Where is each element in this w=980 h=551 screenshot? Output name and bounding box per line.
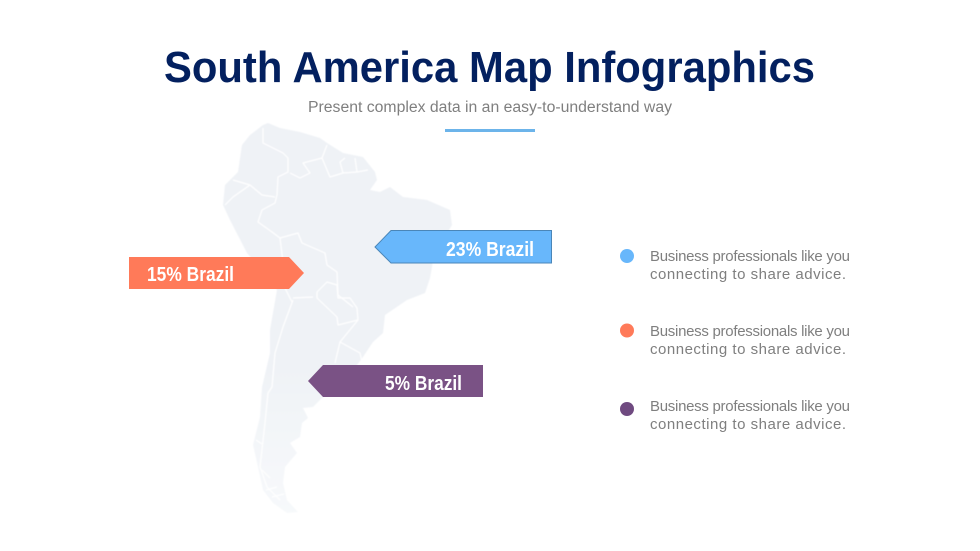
title: South America Map Infographics — [164, 43, 815, 92]
legend item: orange — [620, 323, 850, 358]
legend item: purple: connecting to share advice. — [650, 416, 846, 433]
title underline — [445, 129, 535, 132]
arrow: 5% Brazil — [308, 365, 483, 397]
legend item: blue: Business professionals like you — [650, 248, 850, 265]
arrow: 15% Brazil: 15% Brazil — [147, 264, 234, 286]
arrow: 15% Brazil — [129, 257, 304, 289]
map: South America — [223, 123, 452, 513]
arrow: 23% Brazil: 23% Brazil — [446, 239, 534, 261]
legend item: purple — [620, 398, 850, 433]
subtitle: Present complex data in an easy-to-understand way — [308, 99, 672, 116]
legend item: purple: Business professionals like you — [650, 398, 850, 415]
legend item: blue — [620, 248, 850, 283]
arrow: 5% Brazil: 5% Brazil — [385, 373, 462, 395]
legend item: orange: Business professionals like you — [650, 323, 850, 340]
legend item: orange: connecting to share advice. — [650, 341, 846, 358]
arrow: 23% Brazil — [375, 230, 552, 263]
legend item: blue: connecting to share advice. — [650, 266, 846, 283]
